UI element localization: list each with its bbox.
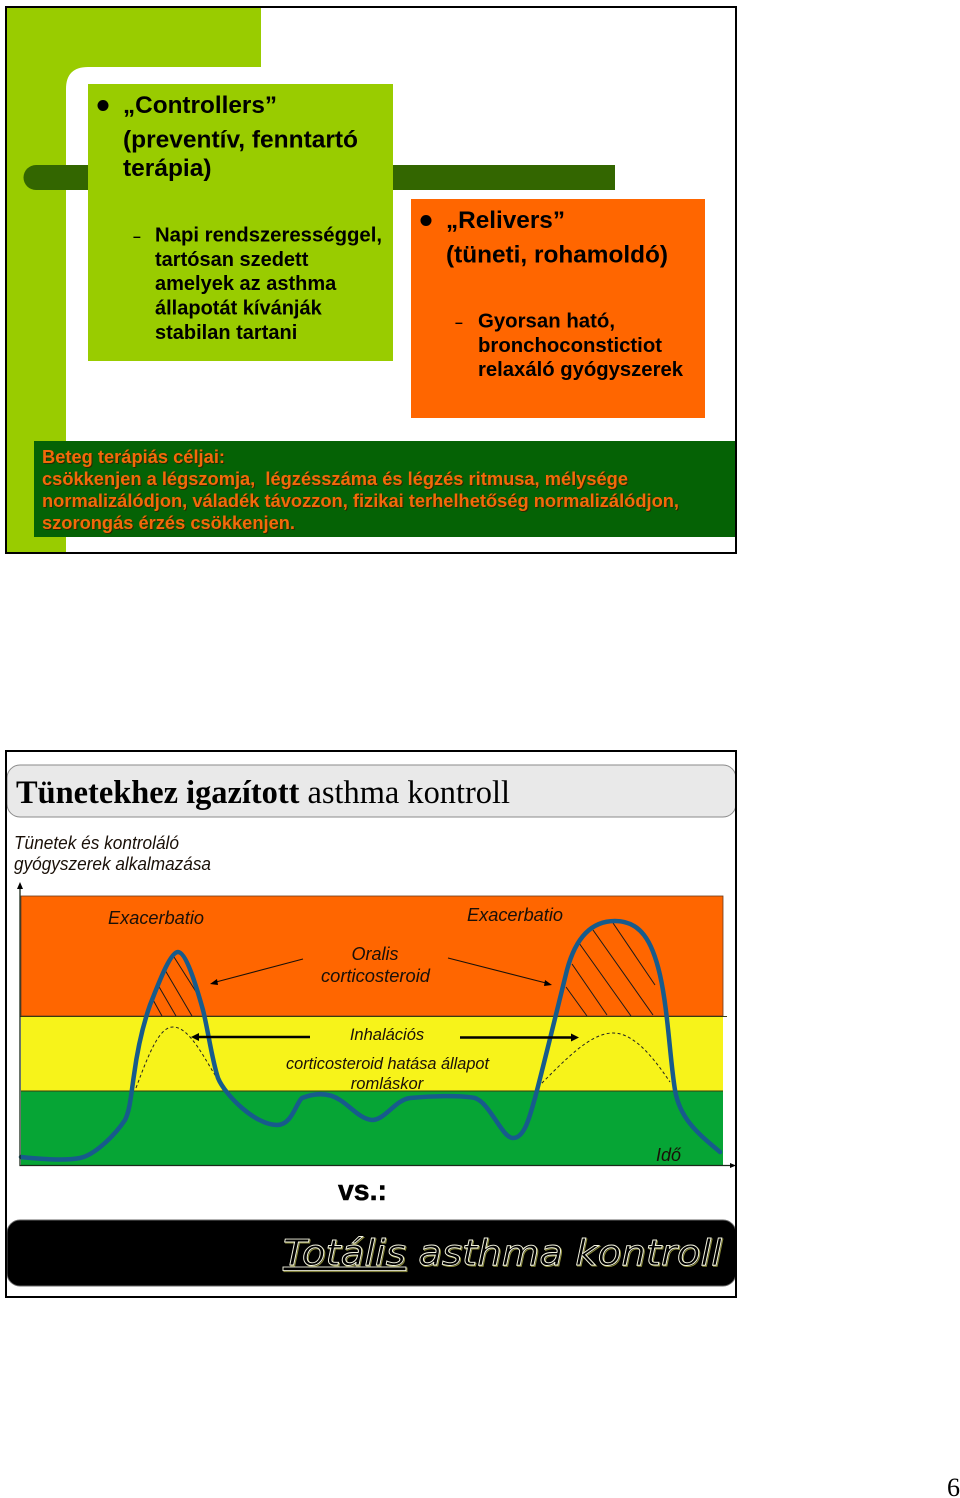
label: inhaled corticosteroid effect: romláskor [351, 1075, 425, 1093]
relievers description: bronchoconstictiot [478, 335, 662, 357]
label: oral corticosteroid: corticosteroid [321, 966, 431, 986]
relievers heading: „Relivers” [446, 207, 565, 234]
label: exacerbation 1: Exacerbatio [108, 908, 204, 928]
therapy goals text: szorongás érzés csökkenjen. [42, 512, 295, 533]
label: exacerbation 2: Exacerbatio [467, 905, 563, 925]
lime green corner background [7, 8, 261, 552]
arrow: inhaled to dashed curve 1 [191, 1033, 310, 1041]
controllers description: Napi rendszerességgel, [155, 224, 382, 246]
relievers description: Gyorsan ható, [478, 310, 615, 332]
therapy goals text: csökkenjen a légszomja, légzésszáma és légzés ritmusa, mélysége [42, 468, 628, 489]
label: oral corticosteroid [321, 944, 431, 986]
panel: controllers [88, 84, 393, 361]
controllers description [133, 224, 382, 344]
controllers description: állapotát kívánják [155, 298, 323, 320]
icon: relievers bullet [420, 215, 432, 226]
controllers description: stabilan tartani [155, 322, 297, 344]
axis label: symptoms and medication: gyógyszerek alkalmazása [14, 854, 211, 874]
banner: total asthma control [7, 1220, 736, 1286]
arrow: oral to peak 2 [448, 958, 552, 986]
controllers description: amelyek az asthma [155, 273, 337, 295]
title bar [7, 765, 736, 817]
yellow moderate zone [21, 1016, 723, 1091]
controllers description: – [133, 228, 141, 244]
axis label: symptoms and medication: Tünetek és kontroláló [14, 833, 179, 853]
label: inhaled corticosteroid effect: corticosteroid hatása állapot [286, 1055, 490, 1073]
axes [17, 882, 736, 1168]
orange severe zone [21, 896, 723, 1016]
controllers heading: (preventív, fenntartó [123, 126, 358, 154]
versus label: vs.: [338, 1175, 387, 1207]
arrow: inhaled to dashed curve 2 [460, 1034, 579, 1042]
icon: controllers bullet [98, 100, 108, 111]
controllers heading: terápia) [123, 155, 212, 182]
controllers heading [123, 92, 358, 182]
therapy goals text: Beteg terápiás céljai: [42, 446, 225, 467]
chart: symptom curve over time [17, 882, 736, 1168]
label: oral corticosteroid: Oralis [351, 944, 399, 964]
label: time: Idő [656, 1145, 682, 1165]
relievers description [455, 310, 684, 381]
relievers heading [446, 207, 668, 268]
panel: patient therapy goals [34, 441, 735, 537]
therapy goals text: normalizálódjon, váladék távozzon, fizikai terhelhetőség normalizálódjon, [42, 490, 679, 511]
controllers heading: „Controllers” [123, 92, 277, 119]
dashed reduced curve 1 [136, 1027, 217, 1088]
banner: total asthma control: Totális asthma kontroll [284, 1234, 723, 1275]
controllers description: tartósan szedett [155, 249, 309, 271]
label: inhaled corticosteroid effect [286, 1026, 490, 1093]
hatching: oral corticosteroid peak 1 [152, 957, 200, 1016]
relievers description: – [455, 314, 463, 330]
therapy goals text [42, 446, 679, 533]
green controlled zone [21, 1091, 723, 1165]
arrow: oral to peak 1 [210, 959, 303, 985]
dashed reduced curve 2 [538, 1033, 670, 1087]
relievers heading: (tüneti, rohamoldó) [446, 242, 668, 268]
slide 2: symptom-based asthma control [6, 751, 736, 1297]
hatching: oral corticosteroid peak 2 [566, 923, 655, 1016]
dark green horizontal pill bar [23, 165, 615, 190]
title bar: Tünetekhez igazított asthma kontroll [16, 775, 510, 811]
panel: relievers [411, 199, 705, 418]
banner: total asthma control: Totális asthma kontroll [283, 1233, 722, 1274]
axis label: symptoms and medication [14, 833, 211, 874]
label: inhaled corticosteroid effect: Inhalációs [350, 1026, 424, 1044]
relievers description: relaxáló gyógyszerek [478, 359, 684, 381]
symptom curve [21, 921, 720, 1160]
